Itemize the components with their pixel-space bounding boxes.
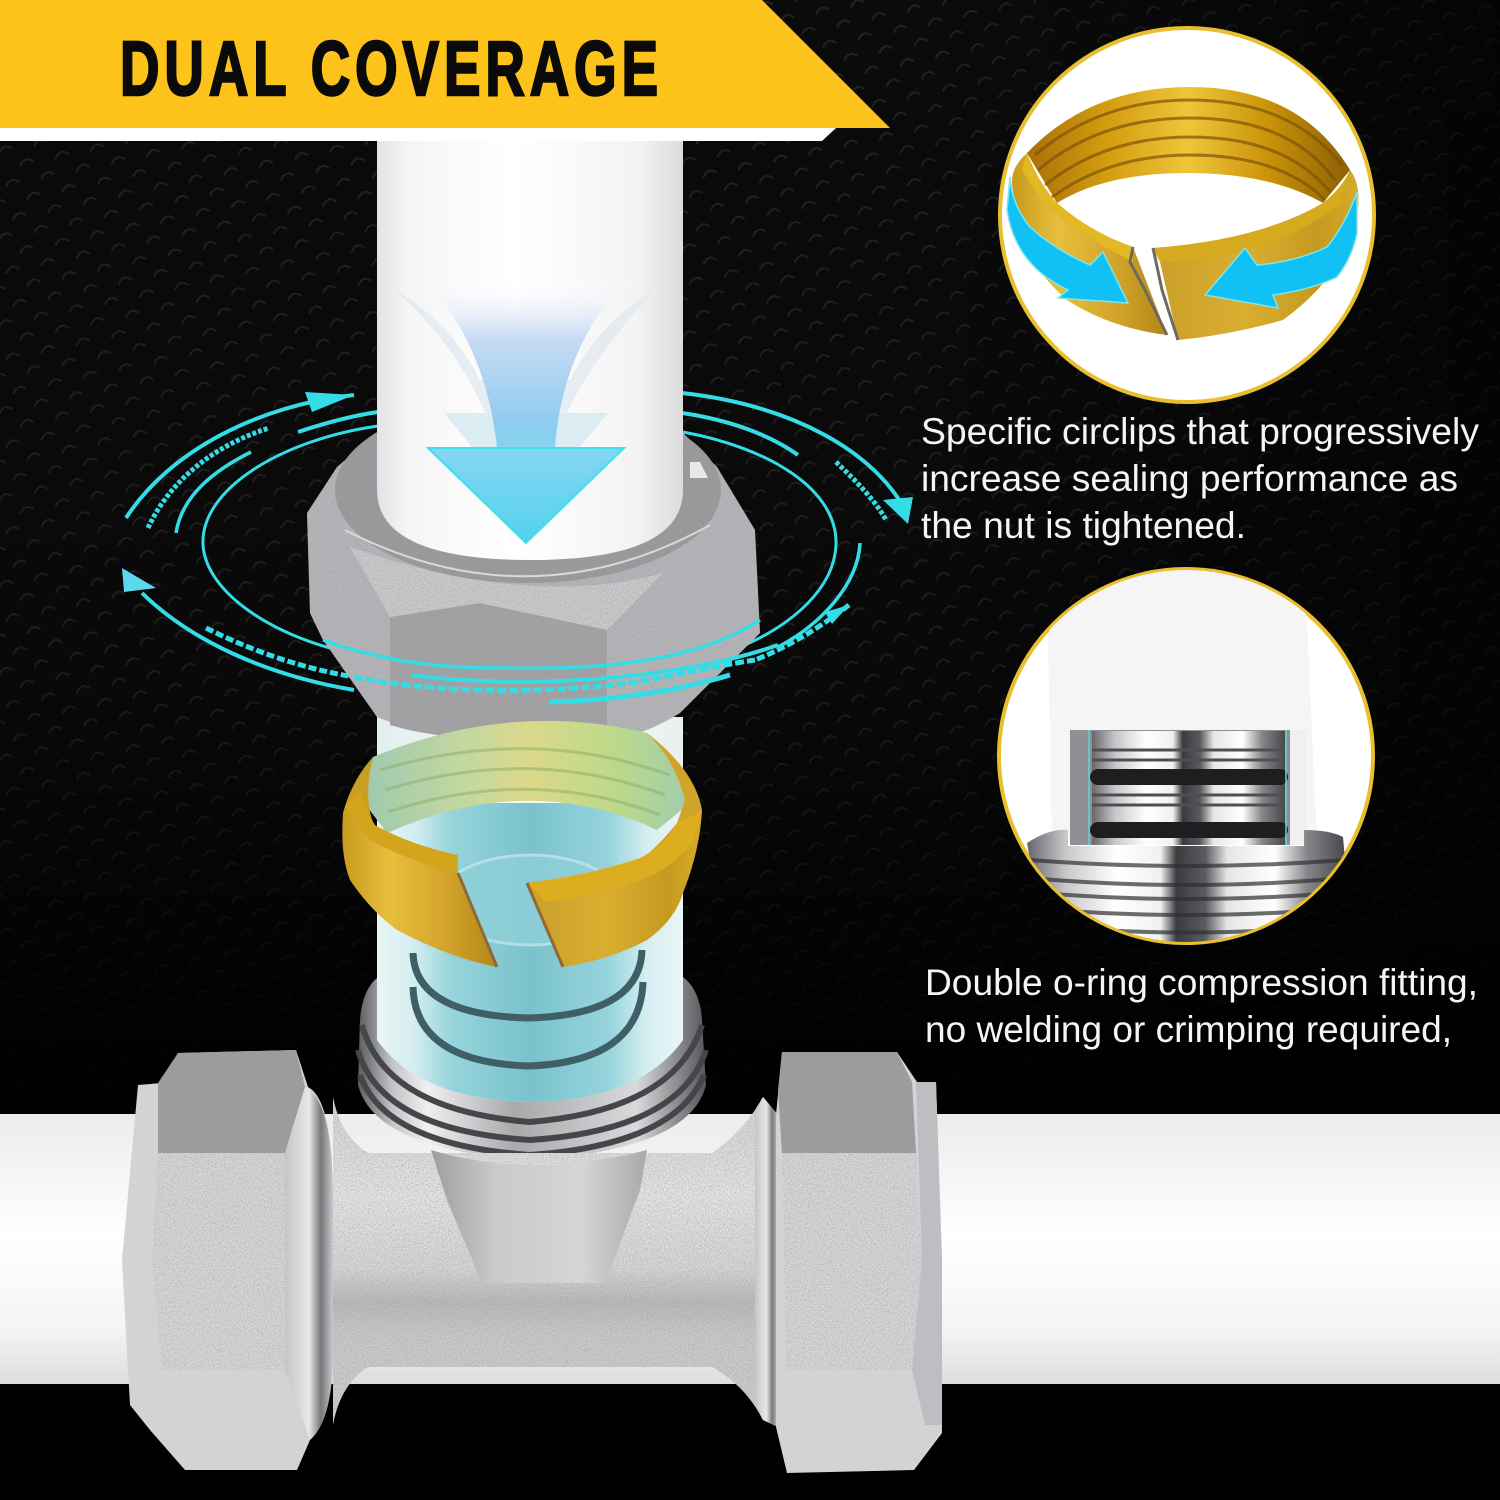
lower pipe section <box>377 717 683 1102</box>
caption 1: increase sealing performance as <box>921 458 1458 499</box>
circle: double o-ring detail <box>999 560 1373 960</box>
horizontal white pipe <box>0 1114 1500 1384</box>
rotation arrows: back arcs <box>122 392 913 690</box>
caption 2: no welding or crimping required, <box>925 1009 1452 1050</box>
title: DUAL COVERAGE <box>120 26 663 112</box>
left compression nut <box>122 1050 333 1470</box>
rotation arrows: front arcs over nut <box>323 605 849 702</box>
caption 1: Specific circlips that progressively <box>921 411 1480 452</box>
brass circlip <box>342 721 702 967</box>
threaded spigot <box>358 977 706 1160</box>
vertical white pipe <box>377 140 683 560</box>
caption 1: the nut is tightened. <box>921 505 1246 546</box>
flow arrow <box>395 280 655 543</box>
yellow title banner <box>0 0 890 141</box>
caption 2: Double o-ring compression fitting, <box>925 962 1478 1003</box>
T fitting body <box>333 1097 778 1427</box>
hex nut <box>307 397 760 738</box>
circle: split ring detail <box>1000 28 1374 402</box>
right compression nut <box>776 1052 942 1473</box>
